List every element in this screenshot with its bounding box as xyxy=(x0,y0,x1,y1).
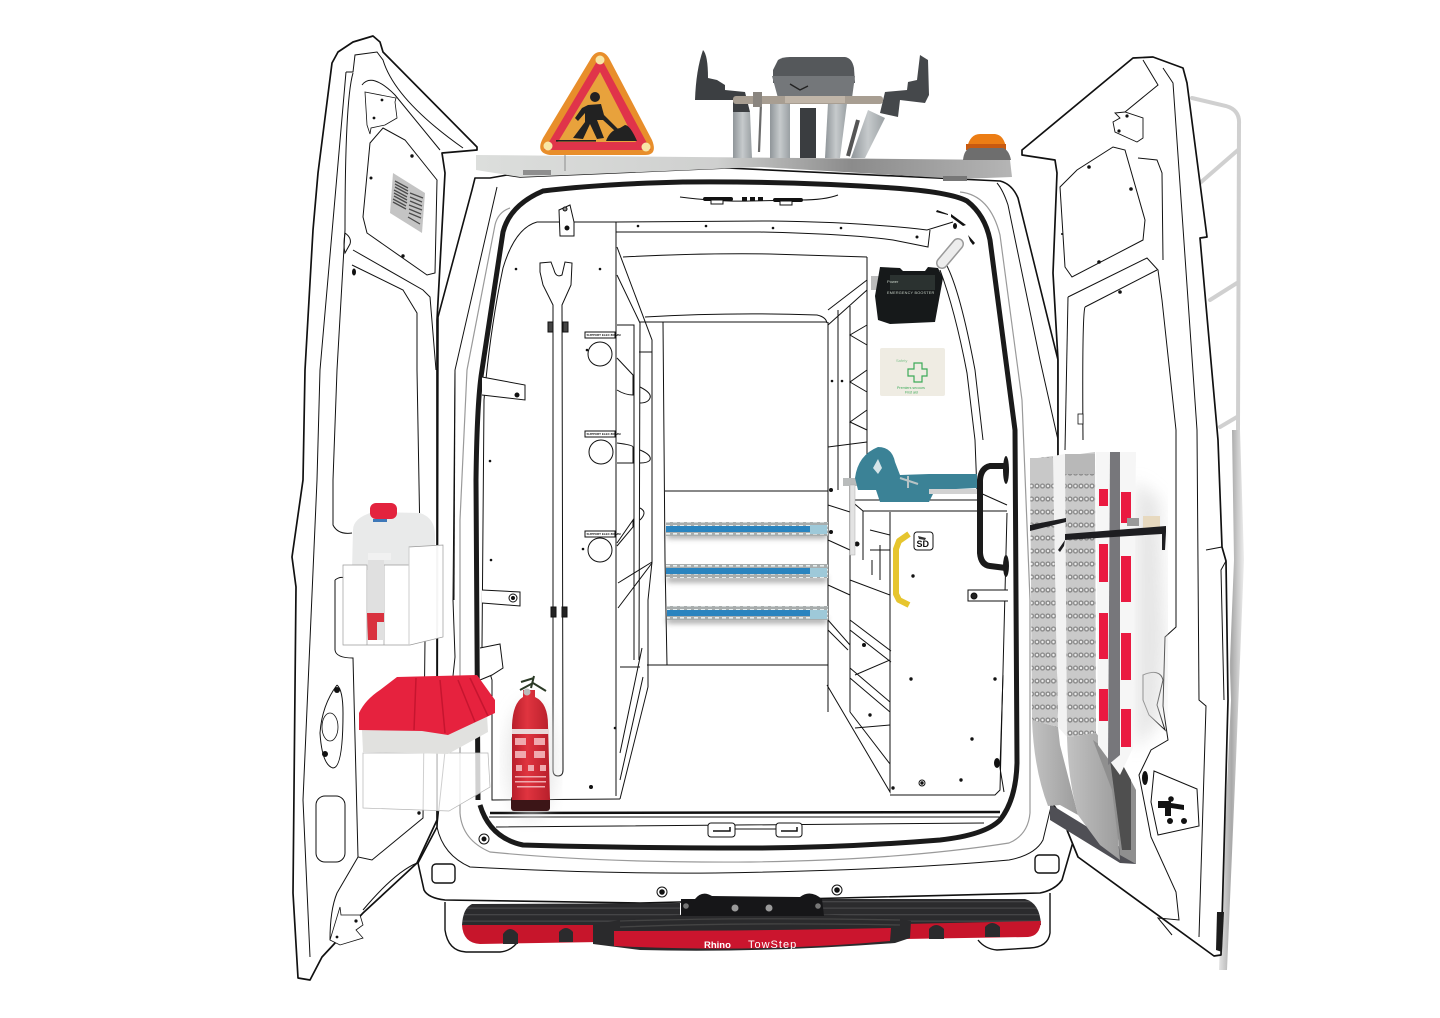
SD logo badge: SD xyxy=(916,539,930,549)
ramp one xyxy=(1030,454,1078,815)
black battery booster case xyxy=(871,267,943,324)
black door handle xyxy=(980,466,1006,568)
Rhino TowStep rear step: TowStep xyxy=(748,939,797,951)
body inner contour lines xyxy=(437,183,1058,873)
bolts xyxy=(413,225,1222,790)
bulkhead labels and circles: SUPPORT ELEC 800MM xyxy=(586,532,621,536)
right door dark lower strip xyxy=(1216,912,1224,952)
tow step brackets line xyxy=(445,893,1050,952)
van body outline xyxy=(418,168,1075,903)
Rhino TowStep rear step xyxy=(462,893,1041,951)
bulkhead labels and circles xyxy=(585,332,621,562)
rear door floor clips and mounts xyxy=(432,823,1059,897)
Rhino TowStep rear step: Rhino xyxy=(704,940,731,951)
rear wall rails xyxy=(666,522,828,623)
SD logo badge xyxy=(914,532,933,550)
roof ladder lift mechanism xyxy=(695,50,929,158)
left wall brackets xyxy=(480,205,574,680)
water tank with holder xyxy=(343,503,443,645)
yellow grab handle xyxy=(896,534,909,605)
black door seal xyxy=(476,182,1017,848)
grey door seal line xyxy=(460,192,1030,862)
fire extinguisher xyxy=(505,676,557,820)
door pull handle xyxy=(1143,672,1165,730)
first aid kit: Safety xyxy=(896,358,907,363)
roof corner clips xyxy=(916,210,975,245)
left door xyxy=(292,36,477,980)
top door frame clips xyxy=(680,195,838,205)
right-side bracket xyxy=(919,590,1008,786)
black battery booster case: Power xyxy=(887,279,899,284)
folding loading ramps xyxy=(1030,452,1166,864)
left door contour lines xyxy=(303,52,463,957)
black battery booster case: EMERGENCY BOOSTER xyxy=(887,291,934,295)
door lock plate xyxy=(1151,771,1199,835)
bulkhead labels and circles: SUPPORT ELEC 800MM xyxy=(586,432,621,436)
first aid kit: First aid xyxy=(905,390,918,394)
black floor threshold line xyxy=(490,812,1000,813)
right door xyxy=(1022,57,1231,956)
sign figure xyxy=(556,92,637,142)
dome lamp xyxy=(942,244,958,263)
silver ladder upright xyxy=(1219,430,1244,970)
first aid kit: Premiers secours xyxy=(897,386,925,390)
ramp two xyxy=(1065,452,1136,864)
ladder rack behind right door xyxy=(1192,98,1239,430)
warning triangle sign xyxy=(540,52,654,155)
cargo interior line drawing xyxy=(482,221,1007,827)
ladder hook tool on bulkhead xyxy=(540,262,572,776)
ramp retaining straps xyxy=(1030,516,1166,552)
first aid kit xyxy=(880,348,945,396)
roof bar xyxy=(476,155,1012,181)
step mounting bracket xyxy=(681,893,824,916)
right door contour lines xyxy=(1060,60,1226,937)
door vent grille xyxy=(390,173,425,233)
bulkhead labels and circles: SUPPORT ELEC 800MM xyxy=(586,333,621,337)
red lidded toolbox xyxy=(359,675,495,811)
orange beacon xyxy=(963,134,1011,160)
reflective strip xyxy=(1096,452,1136,775)
door hinges and mounts xyxy=(365,92,397,134)
dark ramp base xyxy=(1050,804,1136,864)
blue bench vise xyxy=(843,447,977,555)
